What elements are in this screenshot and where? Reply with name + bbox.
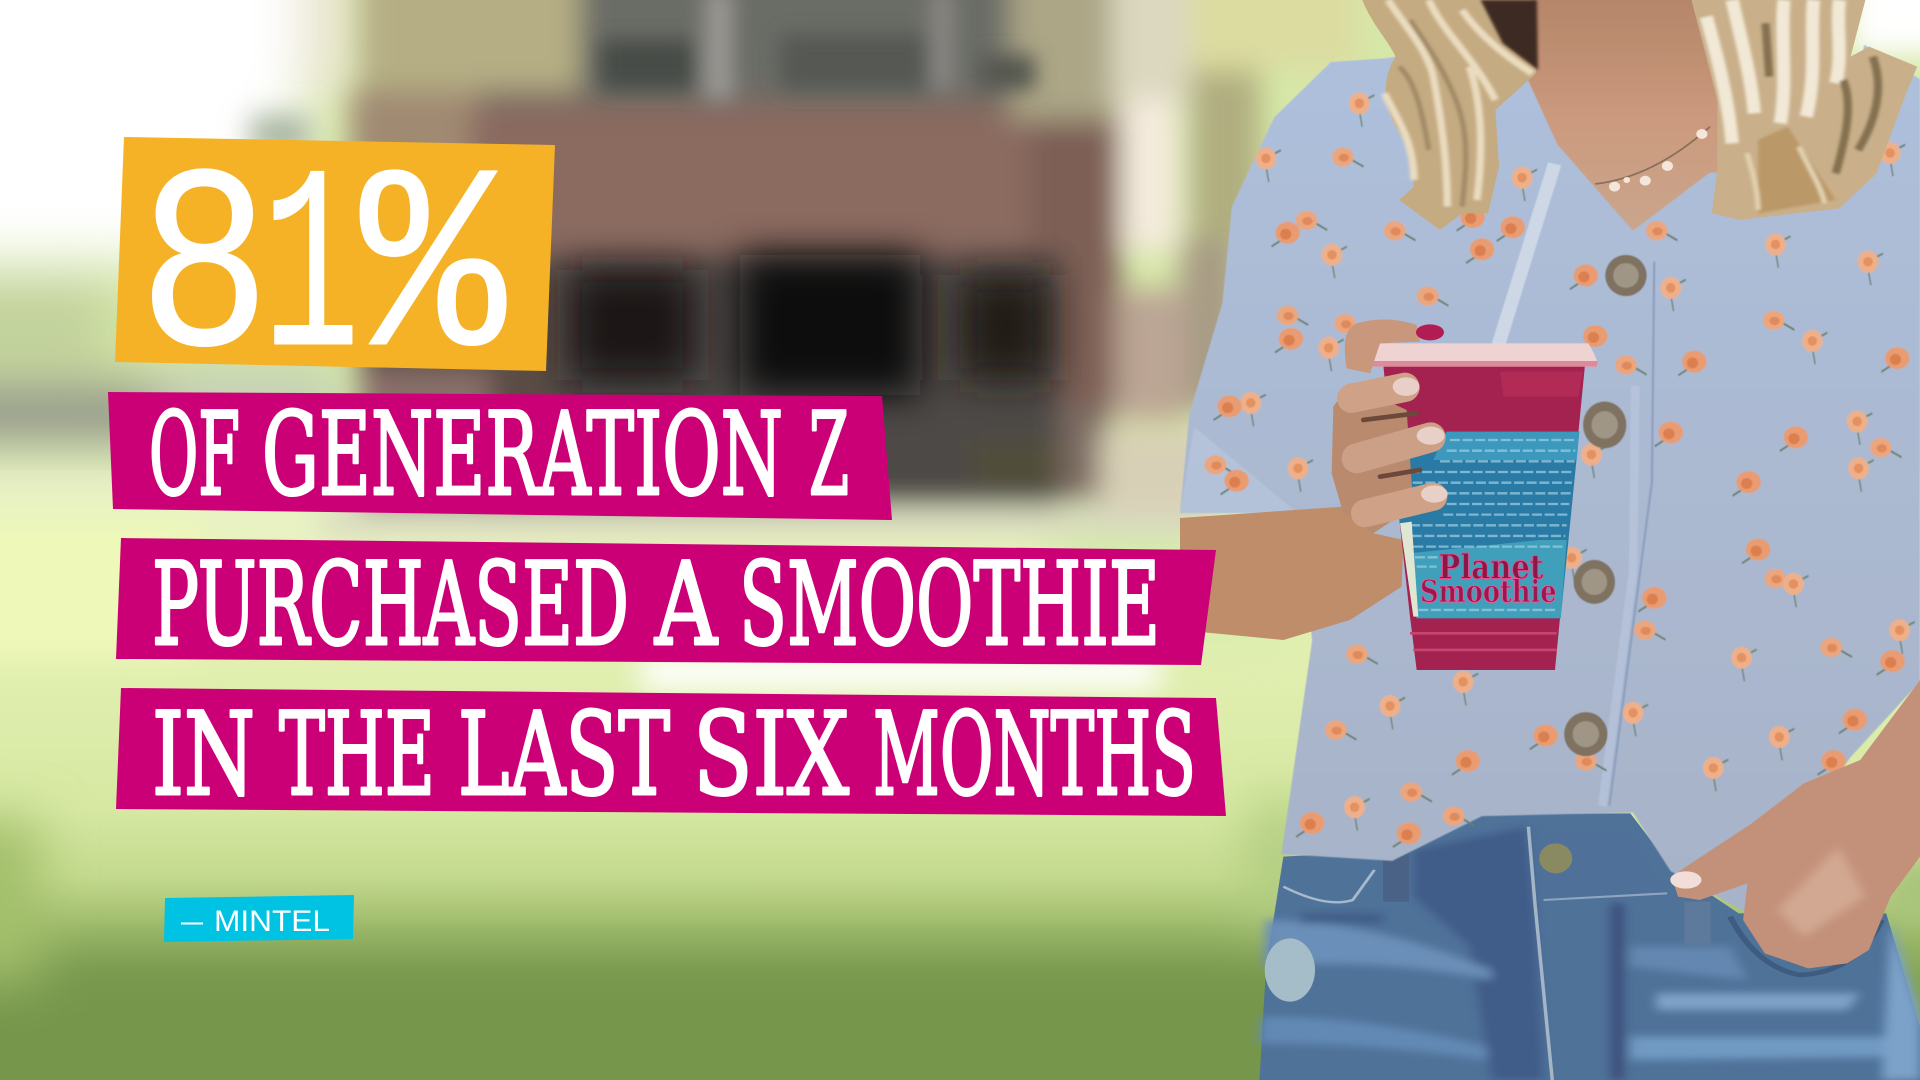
smoothie cup and holding hand [1180,320,1598,670]
banner: of generation z: Z [809,388,849,521]
forearm [1180,507,1403,640]
source tag: Mintel [164,895,354,942]
statistic block: 81%: 8 [138,126,271,423]
banner: purchased a smoothie: A [654,538,718,671]
shirt buttons [1564,255,1647,756]
hand in pocket [1670,680,1920,968]
cup printed band [1397,432,1579,618]
banner: of generation z: OF [149,388,240,521]
banner: in the last six months: MONTHS [873,688,1196,821]
statistic block: 81% [115,126,555,423]
jeans [1260,813,1920,1080]
source tag: Mintel: MINTEL [214,905,330,938]
fingers [1332,320,1448,533]
neck and chest skin [1525,0,1732,243]
statistic block: 81%: % [360,126,508,423]
cup logo [1420,548,1557,610]
cup logo: Smoothie [1420,574,1557,610]
banner: in the last six months [116,688,1226,821]
banner: purchased a smoothie: SMOOTHIE [739,538,1160,671]
straw [1491,163,1561,344]
banner: in the last six months: IN [152,688,255,821]
cup lid [1368,343,1598,367]
banner: in the last six months: LAST [458,688,670,821]
cup logo: Planet [1438,548,1544,587]
banner: of generation z [108,388,892,521]
photo: woman holding smoothie cup [1180,0,1920,1080]
statistic block: 81%: 1 [262,126,360,423]
banner: in the last six months: THE [279,688,435,821]
shirt [1180,41,1920,913]
hair [1362,0,1917,230]
source tag: Mintel: — [181,905,203,938]
shirt flowers [1205,92,1915,847]
banner: purchased a smoothie: PURCHASED [152,538,629,671]
necklace [1595,127,1710,192]
banner: of generation z: GENERATION [262,388,783,521]
cup body [1383,365,1585,670]
banner: in the last six months: SIX [693,688,849,821]
